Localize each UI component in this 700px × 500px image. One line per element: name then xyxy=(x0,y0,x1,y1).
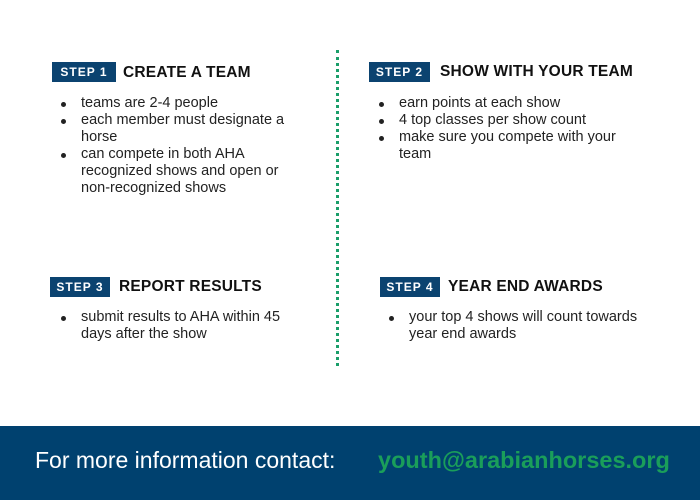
bullets: step 1: recognized shows and open or xyxy=(81,163,278,179)
bullets: step 2: 4 top classes per show count xyxy=(399,112,586,128)
heading: show with your team: SHOW WITH YOUR TEAM xyxy=(440,63,633,80)
bullets: step 3 xyxy=(61,309,280,342)
heading: report results: REPORT RESULTS xyxy=(119,278,262,295)
badge: step 2 xyxy=(369,62,430,82)
panel: step 4 xyxy=(380,277,637,342)
bullets: step 2: make sure you compete with your xyxy=(399,129,616,145)
footer xyxy=(0,426,700,500)
bullets: step 3: submit results to AHA within 45 xyxy=(81,309,280,325)
heading: year end awards: YEAR END AWARDS xyxy=(448,278,603,295)
footer email: youth@arabianhorses.org xyxy=(378,447,670,473)
bullets: step 4 xyxy=(389,309,637,342)
bullets: step 1 xyxy=(61,95,284,196)
bullets: step 4: your top 4 shows will count towards xyxy=(409,309,637,325)
bullets: step 4: year end awards xyxy=(409,326,516,342)
bullets: step 1: teams are 2-4 people xyxy=(81,95,218,111)
badge: step 4: STEP 4 xyxy=(386,280,434,294)
bullets: step 3: days after the show xyxy=(81,326,207,342)
bullets: step 2: earn points at each show xyxy=(399,95,560,111)
badge: step 1: STEP 1 xyxy=(60,65,108,79)
heading: create a team: CREATE A TEAM xyxy=(123,64,251,81)
badge: step 3: STEP 3 xyxy=(56,280,104,294)
badge: step 2: STEP 2 xyxy=(376,65,423,79)
bullets: step 2: team xyxy=(399,146,431,162)
badge: step 4 xyxy=(380,277,440,297)
panel: step 3 xyxy=(50,277,280,342)
panel: step 1 xyxy=(52,62,284,196)
footer text: For more information contact: xyxy=(35,447,335,473)
bullets: step 1: horse xyxy=(81,129,117,145)
badge: step 3 xyxy=(50,277,110,297)
bullets: step 1: can compete in both AHA xyxy=(81,146,245,162)
panel: step 2 xyxy=(369,62,633,162)
badge: step 1 xyxy=(52,62,116,82)
bullets: step 2 xyxy=(379,95,616,162)
bullets: step 1: non-recognized shows xyxy=(81,180,226,196)
divider: dotted line xyxy=(336,50,339,366)
bullets: step 1: each member must designate a xyxy=(81,112,284,128)
